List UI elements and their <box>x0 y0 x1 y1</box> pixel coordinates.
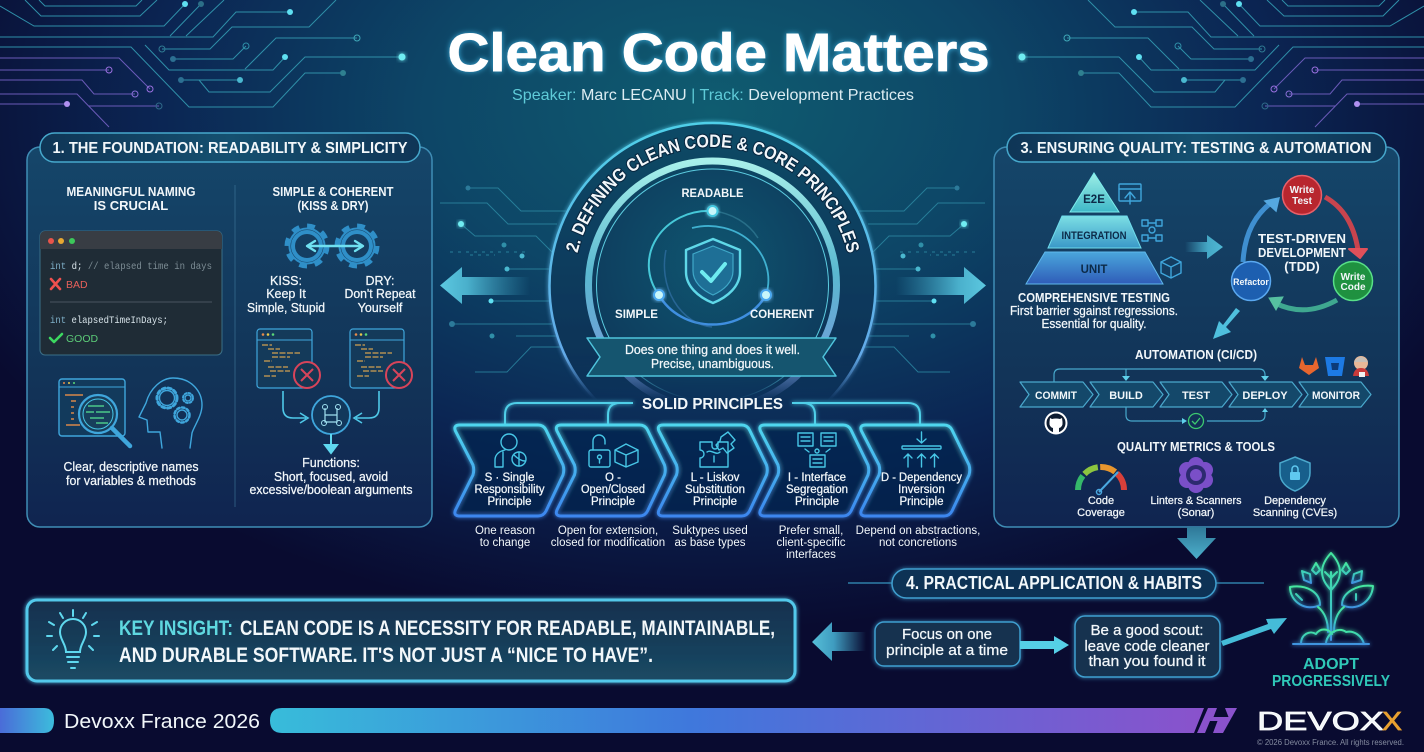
code window: bad and good naming: GOOD <box>66 333 99 345</box>
TDD cycle: Write <box>1341 272 1366 283</box>
CI/CD pipeline <box>1020 369 1371 428</box>
footer bar main segment <box>270 708 1204 733</box>
chevron: I: Principle <box>795 496 839 508</box>
code window: bad and good naming: int elapsedTimeInDays; <box>50 315 168 327</box>
concentric rings <box>545 118 880 398</box>
SOLID captions <box>475 525 980 561</box>
icon: unit cube <box>1161 257 1181 278</box>
key insight text: KEY INSIGHT: <box>119 617 233 640</box>
chevron: D: Inversion <box>898 484 945 496</box>
triad diagram: readable, simple, coherent: READABLE <box>682 186 744 200</box>
chevron: O <box>556 425 665 516</box>
heading: meaningful naming: IS CRUCIAL <box>94 198 168 213</box>
chevron: S: Principle <box>487 496 532 508</box>
icon: GitHub <box>1046 412 1066 434</box>
TDD cycle: DEVELOPMENT <box>1258 245 1346 260</box>
arrows into functions node <box>283 391 379 423</box>
heading: simple and coherent: SIMPLE & COHERENT <box>272 184 394 199</box>
SOLID principles section <box>455 396 980 561</box>
connector brackets <box>505 403 920 425</box>
triad diagram: readable, simple, coherent: SIMPLE <box>615 307 658 321</box>
TDD cycle: (TDD) <box>1284 259 1320 274</box>
TDD cycle: Test <box>1292 196 1313 207</box>
panel 3 heading <box>1007 133 1386 162</box>
panel 1 heading: 1. THE FOUNDATION: READABILITY & SIMPLICITY <box>52 140 408 157</box>
TDD cycle <box>1232 176 1372 310</box>
chevron: I <box>760 425 869 516</box>
icon: rejected code window, DRY <box>350 329 412 388</box>
label: adopt progressively <box>1272 656 1390 690</box>
TDD cycle: TEST-DRIVEN <box>1258 231 1346 246</box>
icon: Jenkins <box>1353 356 1369 377</box>
chevron: L <box>658 425 767 516</box>
caption: descriptive names: Clear, descriptive names <box>64 459 199 474</box>
box: focus on one principle: Focus on one <box>902 626 992 643</box>
copyright: © 2026 Devoxx France. All rights reserved. <box>1257 738 1404 747</box>
ribbon: definition <box>587 338 836 376</box>
code window: bad and good naming: int d; // elapsed time in days <box>50 261 212 273</box>
chevron: O: Open/Closed <box>581 484 645 496</box>
caption: descriptive names: for variables & methods <box>66 473 196 488</box>
testing pyramid: INTEGRATION <box>1062 230 1127 242</box>
label: code coverage: Coverage <box>1077 507 1125 519</box>
panel 2: defining clean code circle <box>545 118 880 398</box>
CI/CD pipeline: DEPLOY <box>1242 390 1288 402</box>
box: focus on one principle: principle at a time <box>886 642 1008 659</box>
label: KISS <box>247 274 325 315</box>
triad diagram: readable, simple, coherent <box>615 186 815 327</box>
icon: linked gears <box>287 226 377 266</box>
panel 1: the foundation <box>27 133 432 527</box>
label: KISS: Keep It <box>266 287 306 301</box>
key insight text <box>119 617 775 667</box>
CI/CD pipeline: COMMIT <box>1035 390 1077 402</box>
caption: functions: excessive/boolean arguments <box>250 483 412 497</box>
icon: Bitbucket <box>1325 357 1345 376</box>
panel 4 heading: practical application: 4. PRACTICAL APPLICATION & HABITS <box>906 573 1202 593</box>
heading: automation: AUTOMATION (CI/CD) <box>1135 348 1257 362</box>
testing pyramid: UNIT <box>1081 264 1107 276</box>
heading: quality metrics: QUALITY METRICS & TOOLS <box>1117 440 1275 454</box>
label: linters: Linters & Scanners <box>1150 495 1242 507</box>
SOLID captions: One reason <box>475 525 535 537</box>
heading: meaningful naming: MEANINGFUL NAMING <box>66 184 196 199</box>
icon: coverage gauge <box>1078 467 1124 494</box>
label: adopt progressively: ADOPT <box>1303 656 1359 673</box>
caption: testing note: Essential for quality. <box>1042 317 1146 331</box>
panel 4 heading: practical application <box>848 569 1264 598</box>
circuit decoration: centre left <box>440 186 580 372</box>
label: KISS: KISS: <box>270 274 302 288</box>
icon: end to end browser <box>1119 184 1141 204</box>
arrow down to functions caption <box>325 434 337 453</box>
label: DRY <box>344 274 416 315</box>
arrow: focus to scout <box>1020 636 1069 654</box>
icon: light bulb <box>47 610 99 668</box>
caption: testing note: First barrier sgainst regressions. <box>1010 304 1178 318</box>
icon: shield with check <box>686 239 740 303</box>
label: code coverage <box>1077 495 1125 519</box>
label: DRY: Yourself <box>358 301 403 315</box>
chevron: I: Segregation <box>786 484 848 496</box>
circuit decoration: top left <box>0 0 406 127</box>
TDD cycle: Write <box>1290 185 1315 196</box>
footer bar left segment <box>0 708 54 733</box>
box: be a good scout <box>1075 616 1220 677</box>
label: adopt progressively: PROGRESSIVELY <box>1272 673 1390 690</box>
box: be a good scout: leave code cleaner <box>1084 638 1210 655</box>
panel 1 heading <box>40 133 420 162</box>
SOLID captions: Suktypes used <box>672 525 748 537</box>
ribbon: definition: Does one thing and does it well. <box>625 343 800 357</box>
caption: functions <box>250 456 412 497</box>
arrow: TDD to CI/CD <box>1213 308 1240 339</box>
chevron: S: S · Single <box>485 472 534 484</box>
chevron: L: Substitution <box>685 484 745 496</box>
label: code coverage: Code <box>1088 495 1114 507</box>
arrow: scout to adopt <box>1221 618 1287 646</box>
footer label: Devoxx France 2026 <box>64 711 260 733</box>
icon: GitLab <box>1299 357 1319 375</box>
label: dependency scanning <box>1253 495 1337 519</box>
box: be a good scout: Be a good scout: <box>1090 622 1204 639</box>
chevron: O: O - <box>605 472 621 484</box>
circuit decoration: centre right <box>845 186 985 372</box>
chevron: D: D - Dependency <box>881 472 962 484</box>
heading: simple and coherent <box>272 184 394 213</box>
caption: testing note <box>1010 304 1178 331</box>
icon: integration network <box>1142 220 1162 241</box>
chevron: S: Responsibility <box>474 484 545 496</box>
chevron: S <box>455 425 564 516</box>
chevron: O: Principle <box>591 496 635 508</box>
label: DRY: DRY: <box>366 274 394 288</box>
code window: bad and good naming <box>40 231 222 355</box>
caption: descriptive names <box>64 459 199 488</box>
testing pyramid <box>1026 173 1163 284</box>
CI/CD pipeline: TEST <box>1182 390 1210 402</box>
CI/CD pipeline: MONITOR <box>1312 390 1360 402</box>
chevron: L: L - Liskov <box>691 472 740 484</box>
caption: functions: Functions: <box>302 456 360 470</box>
SOLID captions: not concretions <box>879 537 957 549</box>
icon: Sonar linter flower <box>1179 457 1213 493</box>
box: be a good scout: than you found it <box>1088 653 1206 670</box>
icon: head with gears <box>139 378 202 448</box>
panel 3: ensuring quality <box>994 133 1399 527</box>
DEVOXX logo <box>1257 706 1402 736</box>
box: focus on one principle <box>875 622 1020 666</box>
icon: dependency scanning shield <box>1280 457 1310 491</box>
SOLID captions: Prefer small, <box>779 525 843 537</box>
SOLID captions: client-specific <box>776 537 846 549</box>
key insight text: AND DURABLE SOFTWARE. IT'S NOT JUST A “NICE TO HAVE”. <box>119 644 653 667</box>
icon: code under magnifier <box>59 379 130 446</box>
panel 3 heading: 3. ENSURING QUALITY: TESTING & AUTOMATION <box>1020 140 1372 157</box>
label: dependency scanning: Dependency <box>1264 495 1326 507</box>
SOLID captions: Depend on abstractions, <box>856 525 980 537</box>
label: dependency scanning: Scanning (CVEs) <box>1253 507 1337 519</box>
TDD cycle: Refactor <box>1233 277 1269 287</box>
key insight text: CLEAN CODE IS A NECESSITY FOR READABLE, MAINTAINABLE, <box>240 617 775 640</box>
arrow: pyramid to TDD <box>1185 235 1223 259</box>
SOLID captions: Open for extension, <box>558 525 658 537</box>
SOLID captions: to change <box>480 537 530 549</box>
SOLID captions: interfaces <box>786 549 836 561</box>
ribbon: definition: Precise, unambiguous. <box>651 357 774 371</box>
right arrow from core circle <box>896 267 986 304</box>
CI/CD pipeline: BUILD <box>1109 390 1143 402</box>
chevron: L: Principle <box>693 496 737 508</box>
caption: functions: Short, focused, avoid <box>274 470 388 484</box>
callout: key insight <box>27 600 795 681</box>
SOLID heading: SOLID PRINCIPLES <box>642 396 783 413</box>
icon: functions node <box>312 396 350 434</box>
caption: comprehensive testing: COMPREHENSIVE TESTING <box>1018 291 1170 305</box>
heading: meaningful naming <box>66 184 196 213</box>
testing pyramid: E2E <box>1083 194 1105 206</box>
icon: rejected code window, KISS <box>257 329 320 388</box>
chevron: D: Principle <box>899 496 944 508</box>
arrow: to key insight <box>812 622 866 661</box>
arrow: quality down to habits <box>1177 527 1216 559</box>
label: DRY: Don't Repeat <box>344 287 416 301</box>
label: linters: (Sonar) <box>1178 507 1214 519</box>
footer slashes mark <box>1197 708 1237 733</box>
label: linters <box>1150 495 1242 519</box>
code window: bad and good naming: BAD <box>66 279 88 291</box>
DEVOXX logo: X <box>1382 706 1402 736</box>
curved heading: 2. DEFINING CLEAN CODE & CORE PRINCIPLES <box>565 133 860 254</box>
chevron: I: I - Interface <box>788 472 846 484</box>
title: Clean Code Matters <box>448 23 990 83</box>
icon: growing plant <box>1290 553 1373 644</box>
DEVOXX logo: DEVOX <box>1257 706 1384 736</box>
TDD cycle: Code <box>1340 282 1366 293</box>
label: KISS: Simple, Stupid <box>247 301 325 315</box>
left arrow from core circle <box>440 267 530 304</box>
circuit decoration: top right <box>1018 0 1424 127</box>
SOLID captions: closed for modification <box>551 537 665 549</box>
SOLID captions: as base types <box>675 537 746 549</box>
subtitle: speaker and track: Speaker: Marc LECANU | Track: Development Practices <box>512 87 914 104</box>
triad diagram: readable, simple, coherent: COHERENT <box>750 307 815 321</box>
chevron: D <box>861 425 970 516</box>
heading: simple and coherent: (KISS & DRY) <box>298 198 368 213</box>
